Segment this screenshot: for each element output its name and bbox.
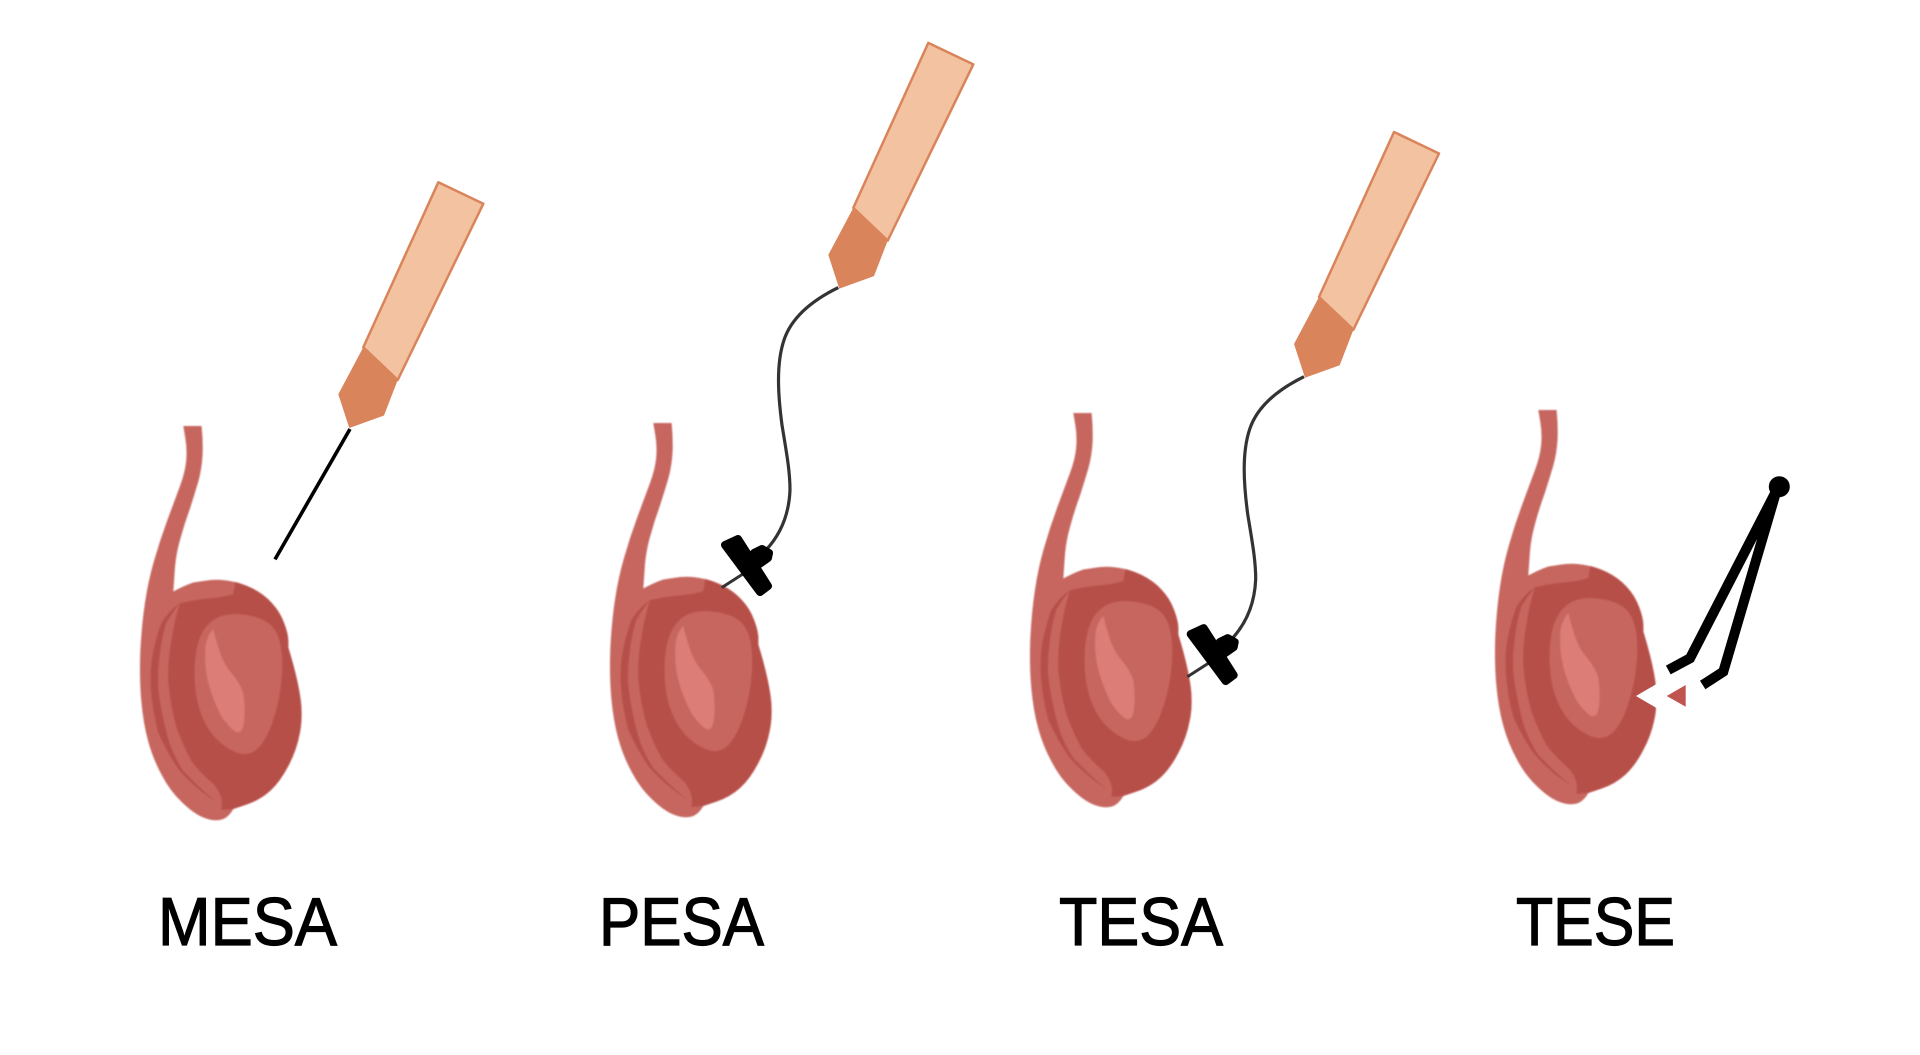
panel: TESE xyxy=(1495,410,1790,960)
label: TESA: TESA xyxy=(1059,884,1224,960)
panel: MESA xyxy=(140,182,483,960)
butterfly needle and tubing xyxy=(722,288,838,592)
label: PESA: PESA xyxy=(599,884,765,960)
testis illustration xyxy=(610,423,772,817)
label: TESE: TESE xyxy=(1516,884,1675,960)
label: MESA: MESA xyxy=(158,884,338,960)
tissue sample xyxy=(1667,685,1686,707)
testis illustration xyxy=(1495,410,1657,804)
syringe xyxy=(1294,132,1439,378)
syringe xyxy=(338,182,483,428)
testis illustration xyxy=(140,426,302,820)
panel: PESA xyxy=(599,43,973,960)
panel: TESA xyxy=(1030,132,1439,960)
needle xyxy=(275,429,350,559)
forceps xyxy=(1668,476,1790,685)
testis illustration xyxy=(1030,413,1192,807)
incision notch xyxy=(1636,640,1700,760)
butterfly needle and tubing xyxy=(1187,377,1304,681)
syringe xyxy=(828,43,973,289)
